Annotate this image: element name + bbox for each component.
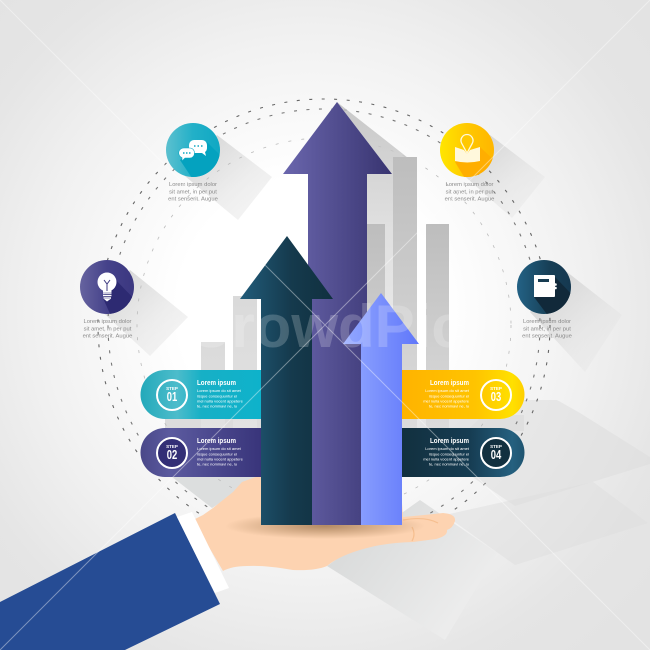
text: top left caption: ent senserit. Augue <box>168 196 218 202</box>
pill: step 03: te, nec nominavi ne, lu <box>429 404 469 409</box>
arrow shadow behind purple arrow <box>337 102 417 420</box>
blue arrow <box>343 293 419 525</box>
pill: step 02: STEP <box>166 444 178 449</box>
pill: step 01: Lorem ipsum do sit amet <box>197 388 242 393</box>
icon: light bulb <box>80 260 134 314</box>
text: top right caption: Lorem ipsum dolor <box>445 182 494 188</box>
pill: step 04: iisque consequuntur ei <box>429 451 469 456</box>
pill: step 03: Lorem ipsum do sit amet <box>425 388 470 393</box>
pill: step 02: mel nulla vocent appetere <box>197 456 244 462</box>
pill: step 03: mel nulla vocent appetere <box>423 398 470 404</box>
pill: step 02: te, nec nominavi ne, lu <box>197 462 237 467</box>
pill: step 04: te, nec nominavi ne, lu <box>429 462 469 467</box>
pill: step 04: mel nulla vocent appetere <box>423 456 470 462</box>
background bar chart <box>201 157 449 432</box>
pill: step 04 <box>402 428 524 477</box>
hand <box>193 475 455 571</box>
pill: step 03: STEP <box>490 386 502 391</box>
teal arrow <box>240 236 333 525</box>
sleeve <box>0 513 220 650</box>
pill: step 01: iisque consequuntur ei <box>197 393 237 398</box>
pill: step 02: Lorem ipsum do sit amet <box>197 446 242 451</box>
dashed orbit rings <box>98 99 550 551</box>
pill: step 01: Lorem ipsum <box>197 380 236 387</box>
pill: step 02 <box>140 428 262 477</box>
text: right caption: Lorem ipsum dolor <box>523 319 571 325</box>
text: top left caption: sit amet, in per put <box>169 189 217 195</box>
text: right caption: ent senserit. Augue <box>522 334 572 340</box>
text: left caption: Lorem ipsum dolor <box>83 319 132 325</box>
pill: step 04: Lorem ipsum do sit amet <box>425 446 470 451</box>
pill: step 02: iisque consequuntur ei <box>197 451 237 456</box>
pill: step 04: 04 <box>491 447 502 462</box>
pill: step 01 <box>140 370 262 419</box>
text: left caption: sit amet, in per put <box>84 326 132 332</box>
purple arrow <box>283 102 392 525</box>
pill: step 01: 01 <box>167 389 177 404</box>
icon: map pin <box>440 123 494 177</box>
text: top right caption: sit amet, in per put <box>446 189 494 195</box>
pill: step 01: mel nulla vocent appetere <box>197 398 244 404</box>
pill: step 04: Lorem ipsum <box>430 438 469 445</box>
shadow under arrows <box>225 513 425 539</box>
pill: step 02: Lorem ipsum <box>197 438 236 445</box>
pill: step 02: 02 <box>167 447 177 462</box>
icon long shadows <box>95 135 622 372</box>
text: left caption: ent senserit. Augue <box>83 334 132 340</box>
watermark: CrowdPic <box>188 293 465 360</box>
icon: notebook <box>517 260 571 314</box>
cuff <box>177 512 229 593</box>
pill: step 01: STEP <box>166 386 178 391</box>
text: top right caption: ent senserit. Augue <box>445 196 494 202</box>
pill: step 03: 03 <box>491 389 501 404</box>
icon: speech bubbles <box>166 123 220 177</box>
text: right caption: sit amet, in per put <box>523 326 571 332</box>
pill: step 03: Lorem ipsum <box>430 380 469 387</box>
pill: step 03 <box>402 370 524 419</box>
pill: step 01: te, nec nominavi ne, lu <box>197 404 237 409</box>
pill: step 03: iisque consequuntur ei <box>429 393 469 398</box>
pill: step 04: STEP <box>490 444 502 449</box>
text: top left caption: Lorem ipsum dolor <box>169 182 217 188</box>
